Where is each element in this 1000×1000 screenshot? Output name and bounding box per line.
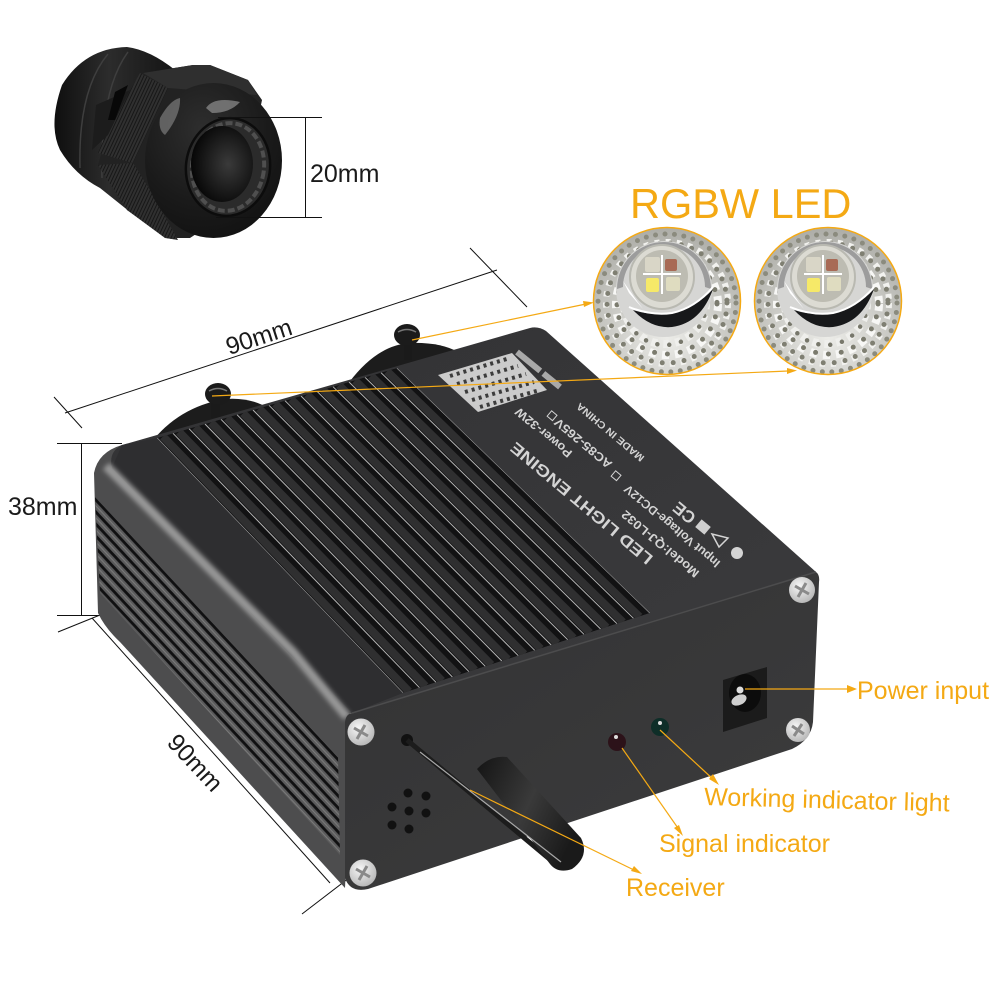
dimension: 38mm: 38mm: [8, 493, 77, 521]
antenna: [401, 734, 584, 871]
top panel: printed label text: Input Voltage-DC12V: [621, 482, 723, 570]
rear humps: [345, 343, 458, 388]
light engine box: [94, 324, 819, 890]
label: signal indicator: Signal indicator: [659, 830, 830, 858]
label: power input: Power input: [857, 677, 989, 705]
top face: [111, 327, 816, 713]
dimension: 90mm top: 90mm: [223, 314, 296, 361]
QR label: [438, 352, 560, 412]
dimension: 90mm top: [54, 248, 527, 428]
callout: LED leader lines: [212, 304, 850, 871]
top panel: printed label text: AC85-265V: [552, 415, 615, 471]
gland rear threaded body: [54, 47, 175, 212]
dimension: 20mm: 20mm: [310, 160, 379, 188]
power socket: [723, 667, 767, 732]
edge highlight: [106, 466, 347, 717]
dimension: 90mm side: 90mm: [162, 729, 228, 797]
signal LED: [608, 733, 626, 751]
speaker holes: [388, 788, 430, 834]
dimension: 90mm side: [58, 615, 362, 914]
label: receiver: Receiver: [626, 874, 725, 902]
gland opening: [180, 113, 276, 221]
screws: [348, 577, 815, 886]
top panel: printed label text: CE: [669, 498, 700, 527]
front face: [345, 572, 819, 890]
label: working indicator light: Working indicator light: [704, 783, 950, 817]
lens 1: [594, 228, 740, 374]
working LED: [651, 718, 669, 736]
dimension: 38mm: [8, 443, 122, 616]
cable gland photo: [54, 47, 282, 240]
gland hex nut: [98, 65, 262, 238]
rear screws: [205, 324, 420, 418]
lens 2: [754, 228, 902, 374]
top panel: printed label text: LED LIGHT ENGINE: [507, 438, 657, 567]
top fins: [157, 366, 656, 693]
heading: RGBW LED: RGBW LED: [630, 180, 851, 227]
top panel: printed label text: Model:QJ-L032: [618, 507, 702, 580]
left side face: [94, 445, 352, 888]
top panel: printed label text: [507, 400, 743, 580]
top panel: printed label text: MADE IN CHINA: [575, 400, 647, 463]
top flat band: [112, 438, 403, 713]
gland dome cap: [145, 83, 282, 238]
left side fins: [95, 497, 340, 855]
callout arrowheads: [583, 301, 857, 874]
top panel: printed label text: Power-32W: [512, 404, 575, 460]
dimension: 20mm: [216, 117, 379, 218]
